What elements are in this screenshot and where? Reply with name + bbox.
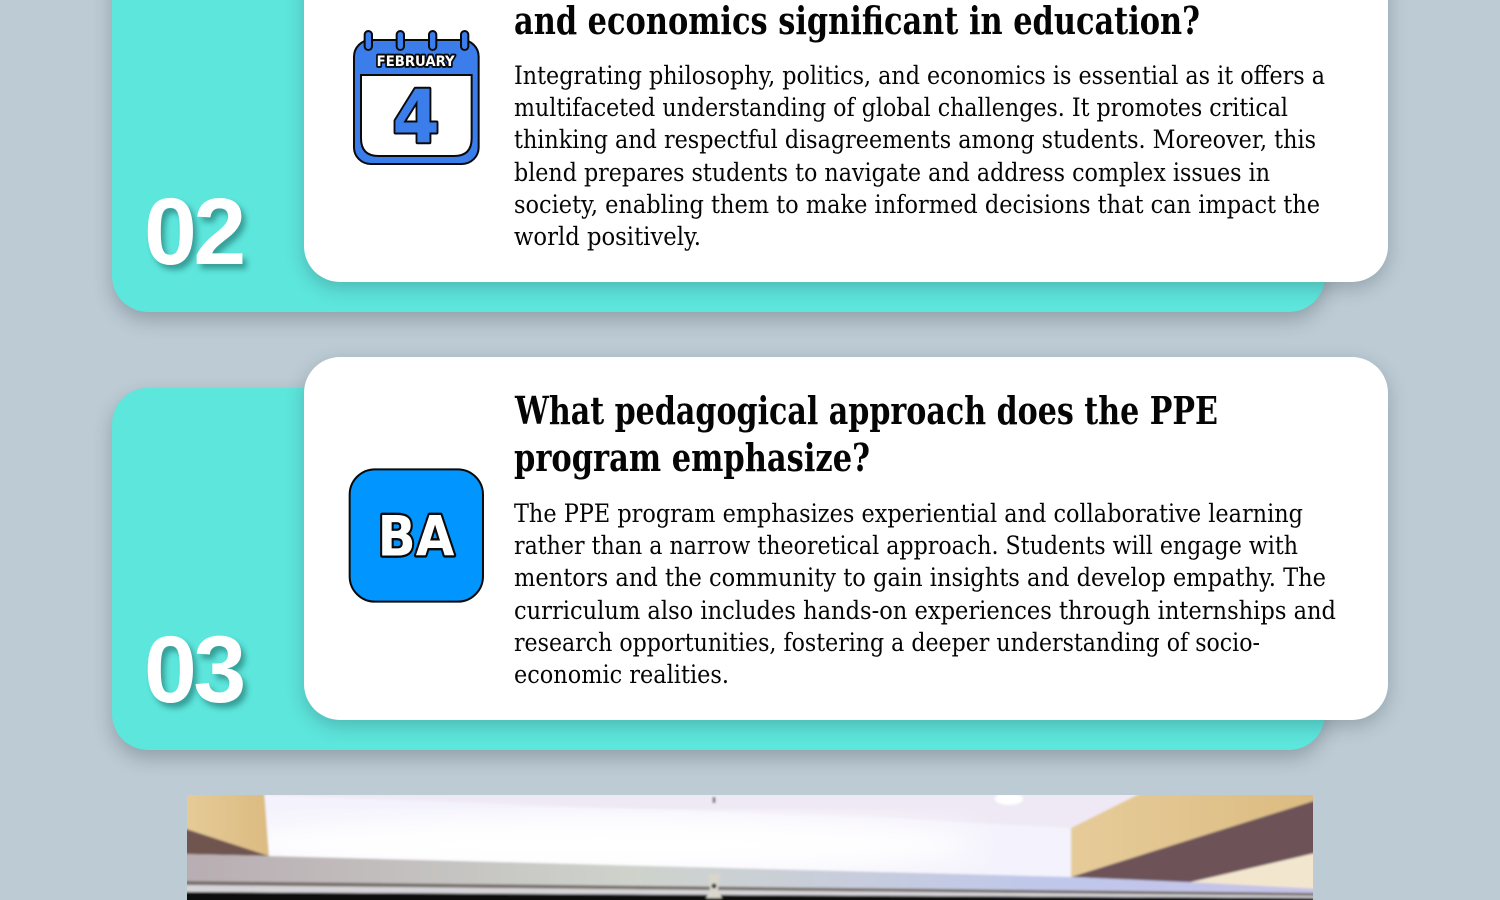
white card 03	[304, 357, 1388, 720]
heading 03: What pedagogical approach does the PPE	[514, 389, 1218, 434]
icon: calendar February 4: 4	[392, 76, 440, 160]
heading 03: program emphasize?	[514, 436, 870, 481]
teal backing 03	[112, 388, 1325, 750]
body 03: curriculum also includes hands-on experiences through internships and	[514, 596, 1336, 626]
panel: card 03	[104, 356, 1396, 766]
body 02: society, enabling them to make informed decisions that can impact the	[514, 190, 1320, 220]
body 02: Integrating philosophy, politics, and economics is essential as it offers a	[514, 61, 1325, 91]
body 02: blend prepares students to navigate and address complex issues in	[514, 158, 1270, 188]
number 02: 02	[144, 179, 243, 285]
icon: BA badge: BA	[378, 504, 455, 568]
body 03: research opportunities, fostering a deeper understanding of socio-	[514, 628, 1260, 658]
heading 02: and economics significant in education?	[514, 0, 1200, 44]
heading 03	[514, 389, 1218, 481]
body 02: thinking and respectful disagreements among students. Moreover, this	[514, 125, 1316, 155]
text: answer 02	[514, 0, 1325, 252]
body 02: multifaceted understanding of global challenges. It promotes critical	[514, 93, 1288, 123]
body 03: rather than a narrow theoretical approach. Students will engage with	[514, 531, 1298, 561]
body 02: world positively.	[514, 222, 701, 252]
body 03	[514, 499, 1336, 690]
icon: calendar February 4	[353, 30, 480, 165]
photo: classroom ceiling	[187, 795, 1313, 900]
panel: card 02	[104, 0, 1396, 328]
text: answer 03	[514, 389, 1336, 690]
body 03: mentors and the community to gain insights and develop empathy. The	[514, 563, 1326, 593]
body 02	[514, 61, 1325, 252]
teal backing 02	[112, 0, 1325, 312]
icon: calendar February 4: FEBRUARY	[377, 54, 455, 70]
body 03: economic realities.	[514, 660, 729, 690]
body 03: The PPE program emphasizes experiential and collaborative learning	[514, 499, 1303, 529]
white card 02	[304, 0, 1388, 282]
icon: BA badge	[348, 468, 484, 603]
number 03: 03	[144, 617, 243, 723]
